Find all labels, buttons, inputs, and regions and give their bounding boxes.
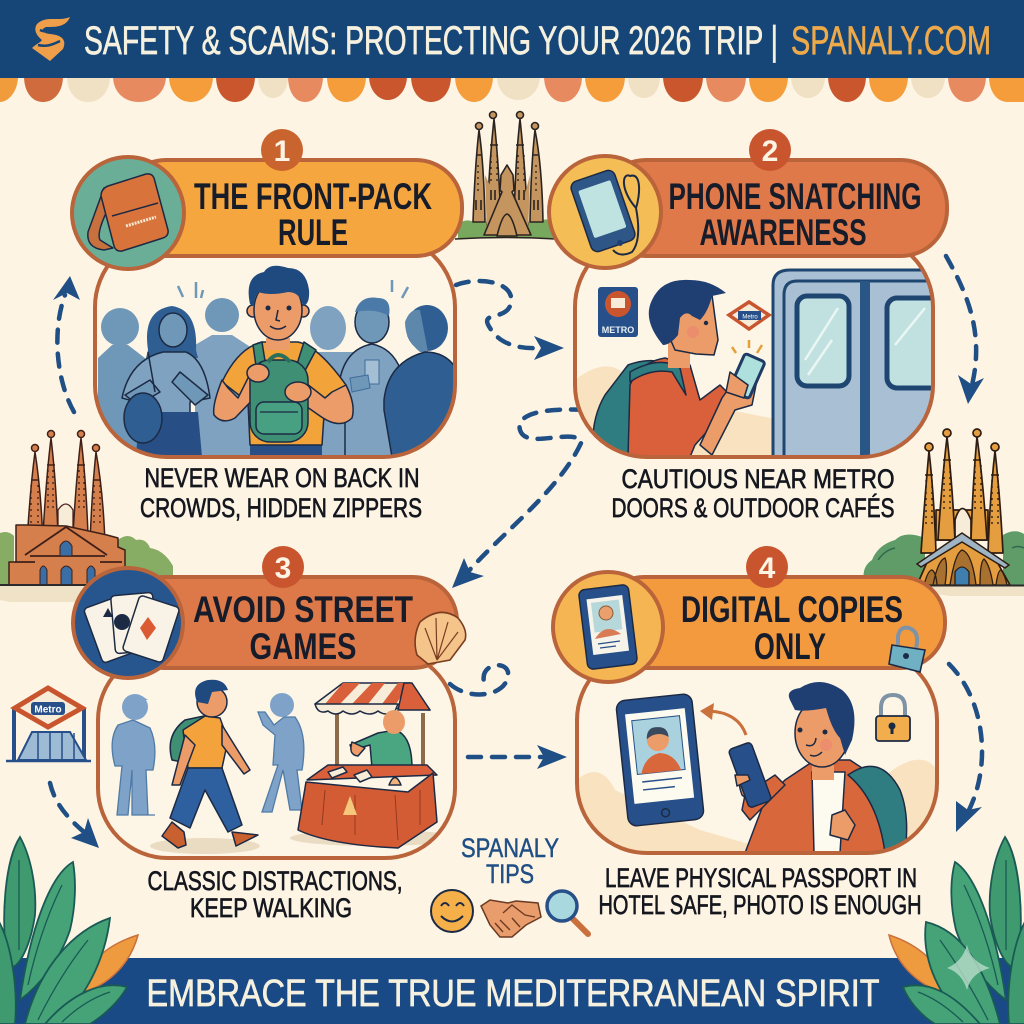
- caption 4: LEAVE PHYSICAL PASSPORT IN: [605, 863, 917, 893]
- number badge 4: 4: [759, 552, 776, 585]
- scene: walker passing street game stall: [98, 650, 460, 858]
- cathedral: right with trees: [860, 429, 1024, 596]
- number badge 2: 2: [762, 135, 778, 168]
- icon: scallop shell: [415, 612, 466, 664]
- number badge 4: [746, 546, 788, 588]
- caption 4: [598, 863, 922, 920]
- heading pill: the front-pack rule: RULE: [278, 212, 348, 253]
- arrow: metro down to step 3: [50, 783, 99, 848]
- icon: crossbody bag: [72, 157, 184, 269]
- arrow: step 3 to step 4: [468, 745, 567, 769]
- header banner: [0, 0, 1024, 78]
- heading pill: digital copies only: ONLY: [754, 626, 826, 667]
- caption 2: [612, 464, 894, 523]
- cathedral: top centre: [455, 112, 556, 239]
- tips heading: [461, 833, 559, 889]
- heading pill: avoid street games: [120, 577, 457, 668]
- footer slogan: EMBRACE THE TRUE MEDITERRANEAN SPIRIT: [146, 973, 880, 1015]
- number badge 3: [262, 546, 304, 588]
- icon: phone with lanyard: [549, 156, 661, 268]
- arrow: small loop near shell: [450, 665, 508, 694]
- caption 2: DOORS & OUTDOOR CAFÉS: [612, 493, 894, 523]
- panel 1: the front-pack rule: [72, 129, 462, 523]
- plant: bottom right: [889, 837, 1024, 1024]
- scene: metro doors and phone user: Metro: [742, 314, 758, 320]
- plant: bottom left: [0, 837, 138, 1024]
- footer banner: [0, 958, 1024, 1024]
- heading pill: phone snatching: PHONE SNATCHING: [668, 176, 922, 217]
- number badge 1: [261, 129, 303, 171]
- heading pill: phone snatching: [600, 160, 947, 256]
- tips heading: TIPS: [486, 859, 534, 889]
- heading pill: the front-pack rule: [120, 160, 462, 256]
- heading pill: phone snatching: AWARENESS: [700, 212, 866, 253]
- icon: handshake: [481, 900, 541, 937]
- panel 4: digital copies only: [553, 546, 945, 920]
- caption 3: CLASSIC DISTRACTIONS,: [148, 866, 402, 896]
- metro entrance sign: [6, 688, 91, 762]
- tips heading: SPANALY: [461, 833, 559, 863]
- icon: magnifier: [547, 891, 588, 934]
- arrow: step 2 down right: [946, 256, 984, 404]
- icon: smiley: [431, 890, 473, 932]
- metro entrance sign: Metro: [34, 704, 62, 716]
- heading pill: avoid street games: GAMES: [250, 626, 356, 667]
- number badge 2: [749, 129, 791, 171]
- caption 3: [148, 866, 402, 923]
- heading pill: avoid street games: AVOID STREET: [193, 589, 413, 630]
- arrow: step 1 to step 2: [456, 281, 564, 360]
- icon: teal padlock: [889, 628, 925, 672]
- cathedral: left with trees: [0, 430, 175, 602]
- icon: orange padlock: [876, 695, 910, 741]
- heading pill: digital copies only: [600, 577, 945, 668]
- caption 3: KEEP WALKING: [190, 893, 352, 923]
- heading pill: the front-pack rule: THE FRONT-PACK: [194, 176, 432, 217]
- panel 3: avoid street games: [73, 546, 466, 923]
- scalloped bunting: [0, 76, 1024, 102]
- number badge 1: 1: [274, 135, 290, 168]
- caption 1: NEVER WEAR ON BACK IN: [144, 463, 420, 493]
- icon: spanaly logo: [32, 17, 70, 61]
- scene: metro doors and phone user: METRO: [602, 325, 634, 335]
- icon: playing cards: [73, 568, 183, 678]
- heading pill: digital copies only: DIGITAL COPIES: [681, 589, 903, 630]
- arrow: step 2 to step 3: [452, 410, 584, 588]
- number badge 3: 3: [275, 552, 291, 585]
- caption 2: CAUTIOUS NEAR METRO: [622, 464, 894, 494]
- scene: crowd with front-worn backpack: [95, 235, 458, 457]
- icon: phone with passport photo: [553, 572, 663, 682]
- scene: passport photo on phone: [575, 671, 939, 855]
- caption 1: CROWDS, HIDDEN ZIPPERS: [140, 493, 422, 523]
- panel 2: phone snatching awareness: [549, 129, 947, 523]
- caption 1: [140, 463, 422, 523]
- arrow: lower right down: [949, 664, 982, 832]
- spanaly tips block: [431, 833, 588, 937]
- caption 4: HOTEL SAFE, PHOTO IS ENOUGH: [598, 890, 922, 920]
- scene: metro doors and phone user: [573, 256, 935, 459]
- arrow: step 4 loop up to step 1: [53, 276, 80, 412]
